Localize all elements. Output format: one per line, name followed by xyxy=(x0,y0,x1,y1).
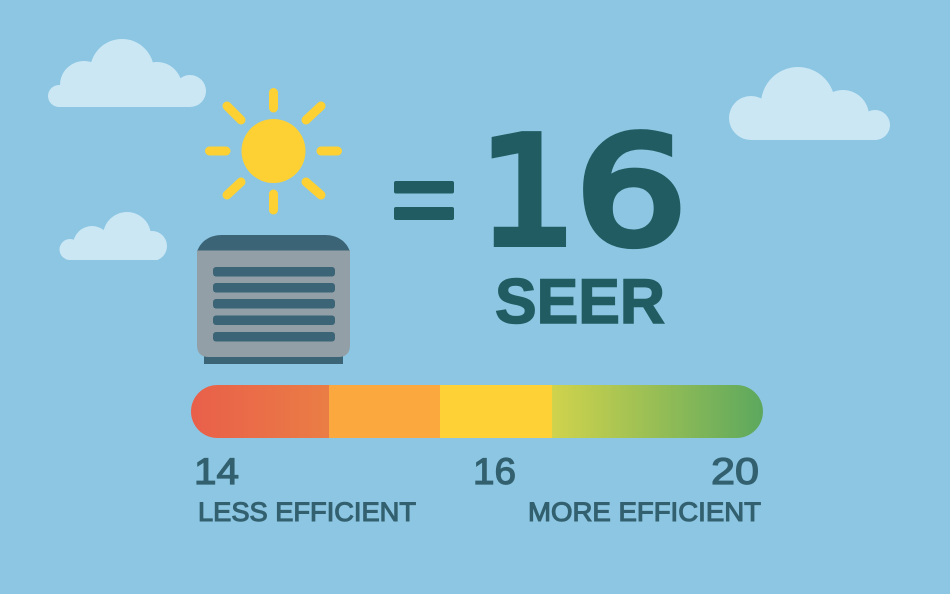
yellow segment xyxy=(440,385,552,438)
unit top cap xyxy=(198,235,350,250)
unit vent slats xyxy=(213,267,335,342)
scale value: 14: 14 xyxy=(194,451,239,492)
cloud: top left xyxy=(48,39,206,112)
scale value: 20: 20 xyxy=(711,451,759,492)
red segment xyxy=(191,385,329,438)
equals sign xyxy=(394,181,454,220)
cloud: top right xyxy=(729,67,890,142)
sun rays xyxy=(210,92,338,210)
big rating number: 6 xyxy=(576,107,687,279)
big rating number: 1 xyxy=(479,107,576,278)
infographic canvas xyxy=(48,39,890,522)
orange segment xyxy=(329,385,440,438)
SEER label: SEER xyxy=(495,267,665,337)
sun disc xyxy=(242,119,306,183)
label: less efficient: LESS EFFICIENT xyxy=(198,497,416,527)
green segment xyxy=(552,385,763,438)
label: more efficient: MORE EFFICIENT xyxy=(528,497,761,527)
scale value: 16: 16 xyxy=(473,451,516,492)
icon: air conditioner unit xyxy=(197,235,350,364)
cloud: lower left xyxy=(60,212,167,264)
unit base xyxy=(204,352,343,364)
big rating number xyxy=(479,107,687,279)
unit body xyxy=(197,250,350,357)
icon: sun xyxy=(210,92,338,210)
efficiency scale bar xyxy=(191,385,763,438)
